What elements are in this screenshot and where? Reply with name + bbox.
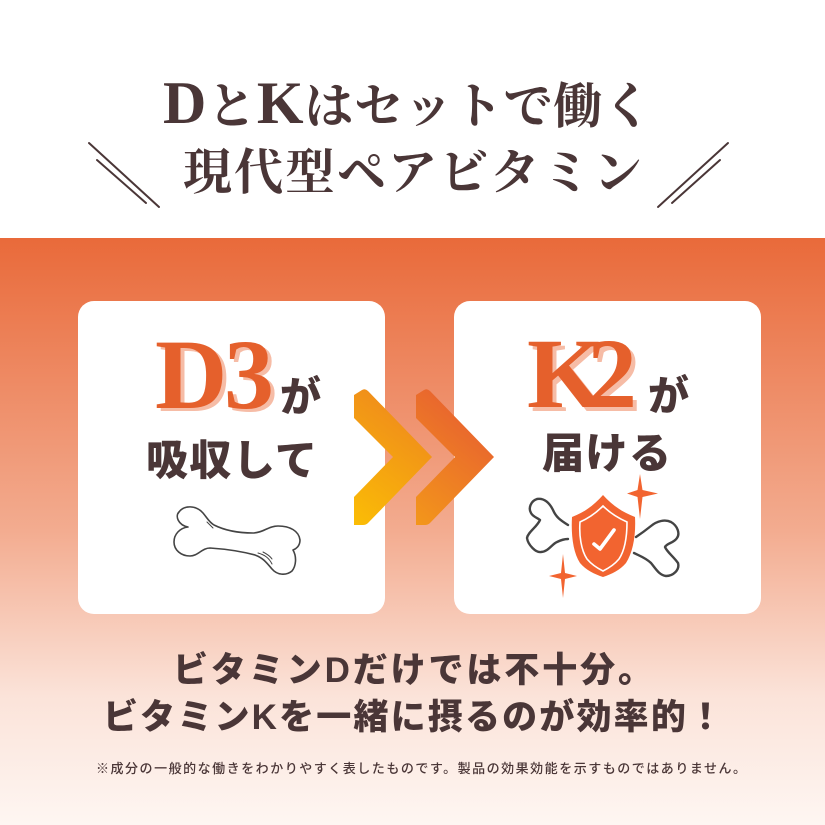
footnote: ※成分の一般的な働きをわかりやすく表したものです。製品の効果効能を示すものではありません。 xyxy=(96,761,746,776)
sparkle xyxy=(627,474,658,519)
title: 現代型ペアビタミン xyxy=(183,145,642,200)
gradient background band xyxy=(0,238,825,825)
shield xyxy=(572,495,635,577)
text: ga: が xyxy=(280,374,321,420)
icon: bone with shield xyxy=(527,474,678,598)
heading: D3: D3 xyxy=(159,322,278,433)
heading: K2: K2 xyxy=(527,318,637,429)
panel: D3 absorption xyxy=(78,301,385,614)
title accent lines right xyxy=(658,143,728,207)
summary text: ビタミンDだけでは不十分。 xyxy=(173,650,653,690)
summary text: ビタミンKを一緒に摂るのが効率的！ xyxy=(103,697,723,737)
heading: K2: K2 xyxy=(531,322,641,433)
summary text xyxy=(103,650,723,737)
sparkle xyxy=(549,554,577,598)
arrow: double chevron xyxy=(354,389,494,525)
text: ga: が xyxy=(648,373,689,419)
heading: D3: D3 xyxy=(155,319,274,430)
text: delivers: 届ける xyxy=(542,430,671,477)
panel: K2 delivery xyxy=(454,301,761,614)
title xyxy=(163,70,652,200)
bone ends xyxy=(527,499,678,576)
title accent lines left xyxy=(89,143,159,207)
check mark xyxy=(594,530,614,549)
title: DとKはセットで働く xyxy=(163,70,652,136)
icon: bone xyxy=(174,507,300,574)
text: absorbs: 吸収して xyxy=(146,437,317,484)
